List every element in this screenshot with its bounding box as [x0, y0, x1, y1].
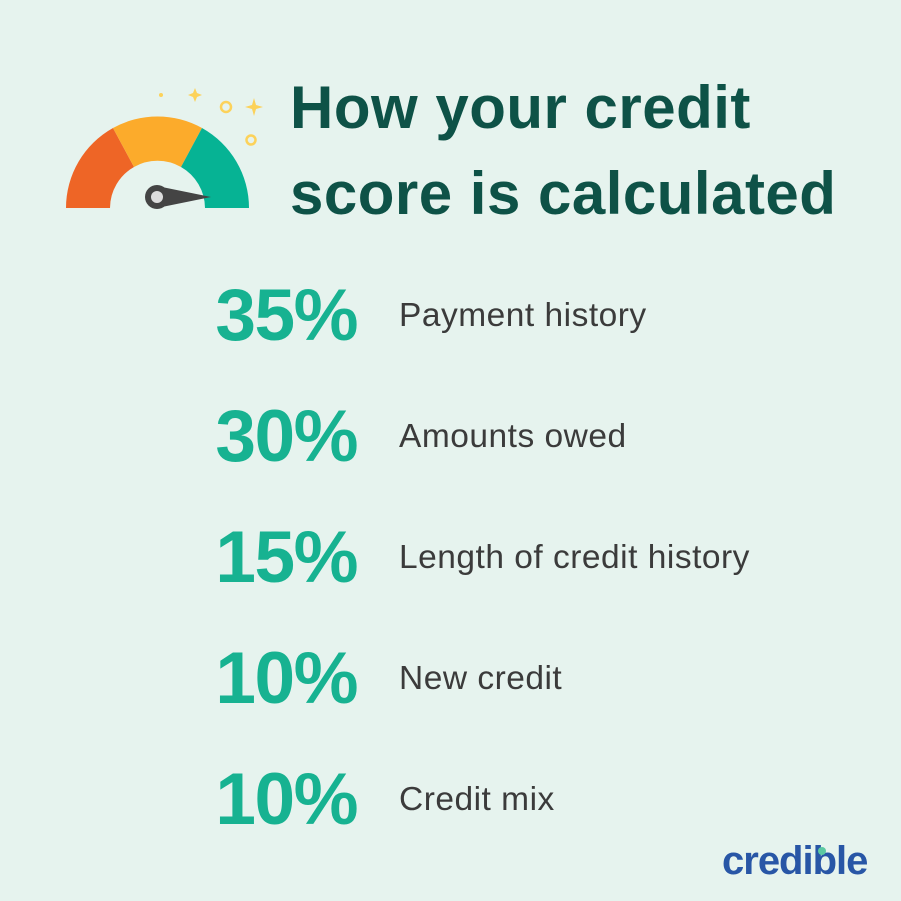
row: amounts owed: 30% [215, 396, 357, 477]
row: amounts owed [215, 396, 627, 477]
needle [145, 185, 211, 209]
row: length of credit history: 15% [215, 517, 357, 598]
logo: credible: credible [722, 839, 867, 883]
row: new credit [215, 638, 562, 719]
row: payment history [215, 275, 647, 356]
gauge segment green [181, 128, 249, 208]
title: score is calculated [290, 160, 836, 227]
row: credit mix: Credit mix [399, 781, 555, 818]
row: new credit: New credit [399, 660, 562, 697]
row: new credit: 10% [215, 638, 357, 719]
icon: gauge [66, 88, 263, 209]
gauge segment orange [66, 128, 134, 208]
row: length of credit history: Length of credit history [399, 539, 750, 576]
row: amounts owed: Amounts owed [399, 418, 627, 455]
sparkles [159, 88, 263, 144]
gauge segment yellow [113, 116, 202, 167]
row: payment history: 35% [215, 275, 357, 356]
row: credit mix: 10% [215, 759, 357, 840]
row: credit mix [215, 759, 555, 840]
title: How your credit [290, 74, 751, 141]
row: length of credit history [215, 517, 750, 598]
row: payment history: Payment history [399, 297, 647, 334]
title [290, 74, 836, 227]
